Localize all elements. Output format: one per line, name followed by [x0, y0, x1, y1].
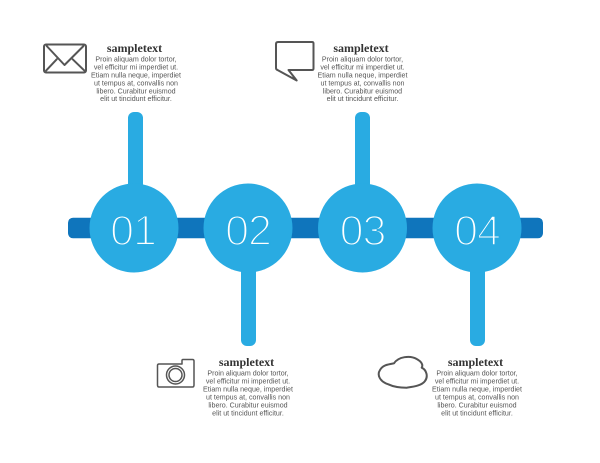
stem 4 [470, 262, 485, 346]
step 02 circle [204, 184, 292, 272]
text block 4: Proin aliquam dolor tortor, [436, 370, 518, 378]
horizontal timeline bar [68, 218, 543, 238]
icon: speech bubble [276, 42, 314, 80]
text block 3: elit ut tincidunt efficitur. [212, 410, 284, 418]
step 03 circle: 03 [340, 207, 385, 255]
text block 1: libero. Curabitur euismod [96, 88, 176, 96]
text block 3: Etiam nulla neque, imperdiet [203, 386, 293, 394]
text block 4 [432, 355, 522, 418]
text block 1: vel efficitur mi imperdiet ut. [94, 64, 178, 72]
text block 2 [318, 41, 407, 103]
text block 4: Etiam nulla neque, imperdiet [432, 386, 522, 394]
text block 3: sampletext [219, 355, 274, 369]
text block 4: elit ut tincidunt efficitur. [441, 410, 513, 418]
step 01 circle [90, 184, 178, 272]
text block 1: elit ut tincidunt efficitur. [100, 95, 172, 103]
text block 2: Proin aliquam dolor tortor, [322, 56, 403, 64]
text block 4: vel efficitur mi imperdiet ut. [435, 378, 519, 386]
text block 1: ut tempus at, convallis non [94, 80, 178, 88]
text block 2: sampletext [333, 41, 389, 55]
icon: envelope [44, 44, 86, 72]
icon: camera [158, 360, 194, 387]
text block 3 [203, 355, 293, 418]
text block 2: elit ut tincidunt efficitur. [327, 95, 398, 103]
text block 4: libero. Curabitur euismod [437, 402, 517, 410]
step 02 circle: 02 [225, 207, 271, 255]
step 04 circle: 04 [454, 207, 500, 255]
text block 4: sampletext [448, 355, 503, 369]
step 04 circle [432, 184, 522, 272]
stem 2 [241, 262, 256, 346]
text block 1: Proin aliquam dolor tortor, [95, 56, 177, 64]
text block 2: Etiam nulla neque, imperdiet [318, 72, 407, 80]
text block 1: Etiam nulla neque, imperdiet [91, 72, 181, 80]
stem 3 [355, 112, 370, 192]
text block 1 [91, 41, 181, 103]
text block 3: ut tempus at, convallis non [206, 394, 290, 402]
text block 2: libero. Curabitur euismod [323, 88, 402, 96]
text block 3: Proin aliquam dolor tortor, [207, 370, 289, 378]
text block 3: libero. Curabitur euismod [208, 402, 288, 410]
icon: cloud [379, 357, 427, 388]
text block 1: sampletext [107, 41, 162, 55]
step 01 circle: 01 [110, 207, 156, 255]
text block 3: vel efficitur mi imperdiet ut. [206, 378, 290, 386]
text block 4: ut tempus at, convallis non [435, 394, 519, 402]
text block 2: ut tempus at, convallis non [320, 80, 405, 88]
stem 1 [128, 112, 143, 192]
step 03 circle [318, 184, 407, 272]
text block 2: vel efficitur mi imperdiet ut. [320, 64, 405, 72]
